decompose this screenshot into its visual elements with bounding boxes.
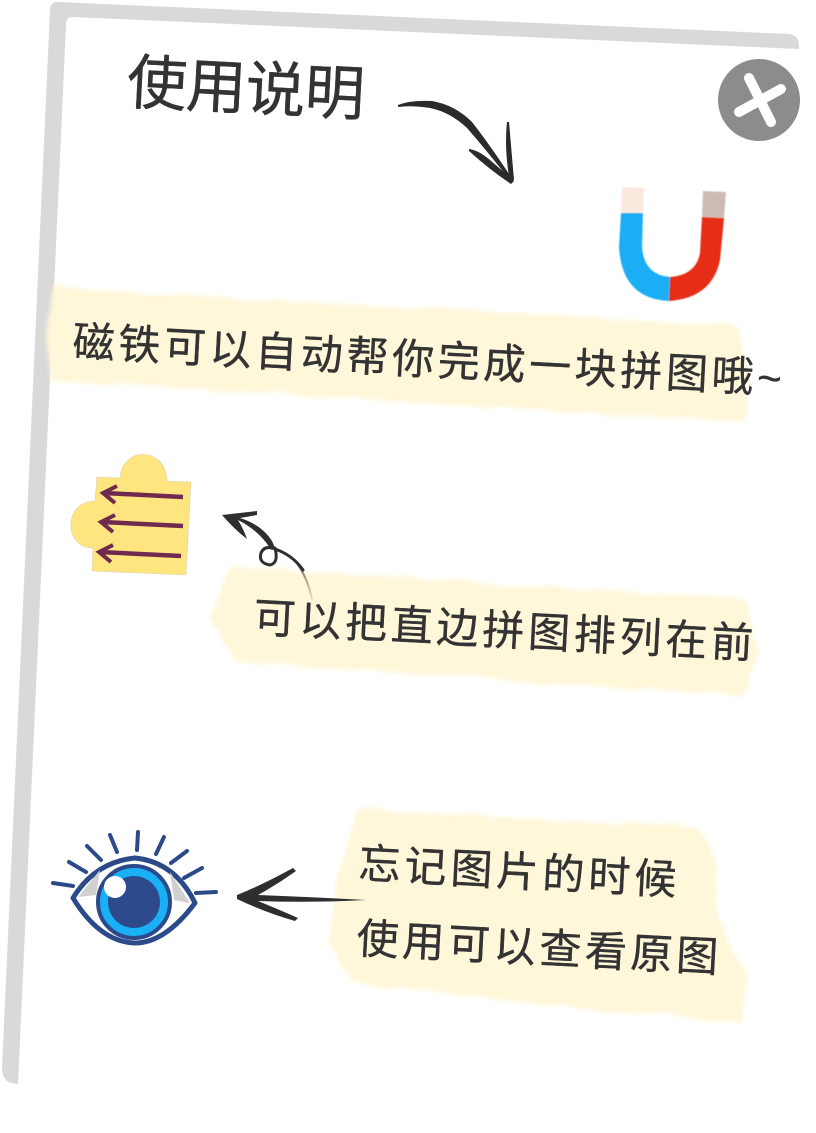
- text: forgot image line 1: 忘记图片的时候: [358, 840, 678, 904]
- icon: eye: [53, 832, 216, 943]
- highlight: eye text: [328, 810, 748, 1022]
- close button: [718, 59, 800, 141]
- arrow: title to magnet: [398, 101, 514, 184]
- arrow: to eye: [237, 868, 366, 921]
- arrow: to puzzle piece: [222, 511, 312, 600]
- text: sort instruction: 可以把直边拼图排列在前: [253, 594, 754, 667]
- highlight: magnet text: [48, 288, 750, 422]
- highlight: sort text: [208, 566, 760, 696]
- icon: straight-edge puzzle piece: [71, 454, 191, 575]
- text: magnet instruction: 磁铁可以自动帮你完成一块拼图哦~: [72, 318, 783, 402]
- title: 使用说明: [125, 49, 366, 128]
- icon: magnet: [619, 187, 726, 301]
- text: forgot image line 2: 使用可以查看原图: [356, 915, 719, 981]
